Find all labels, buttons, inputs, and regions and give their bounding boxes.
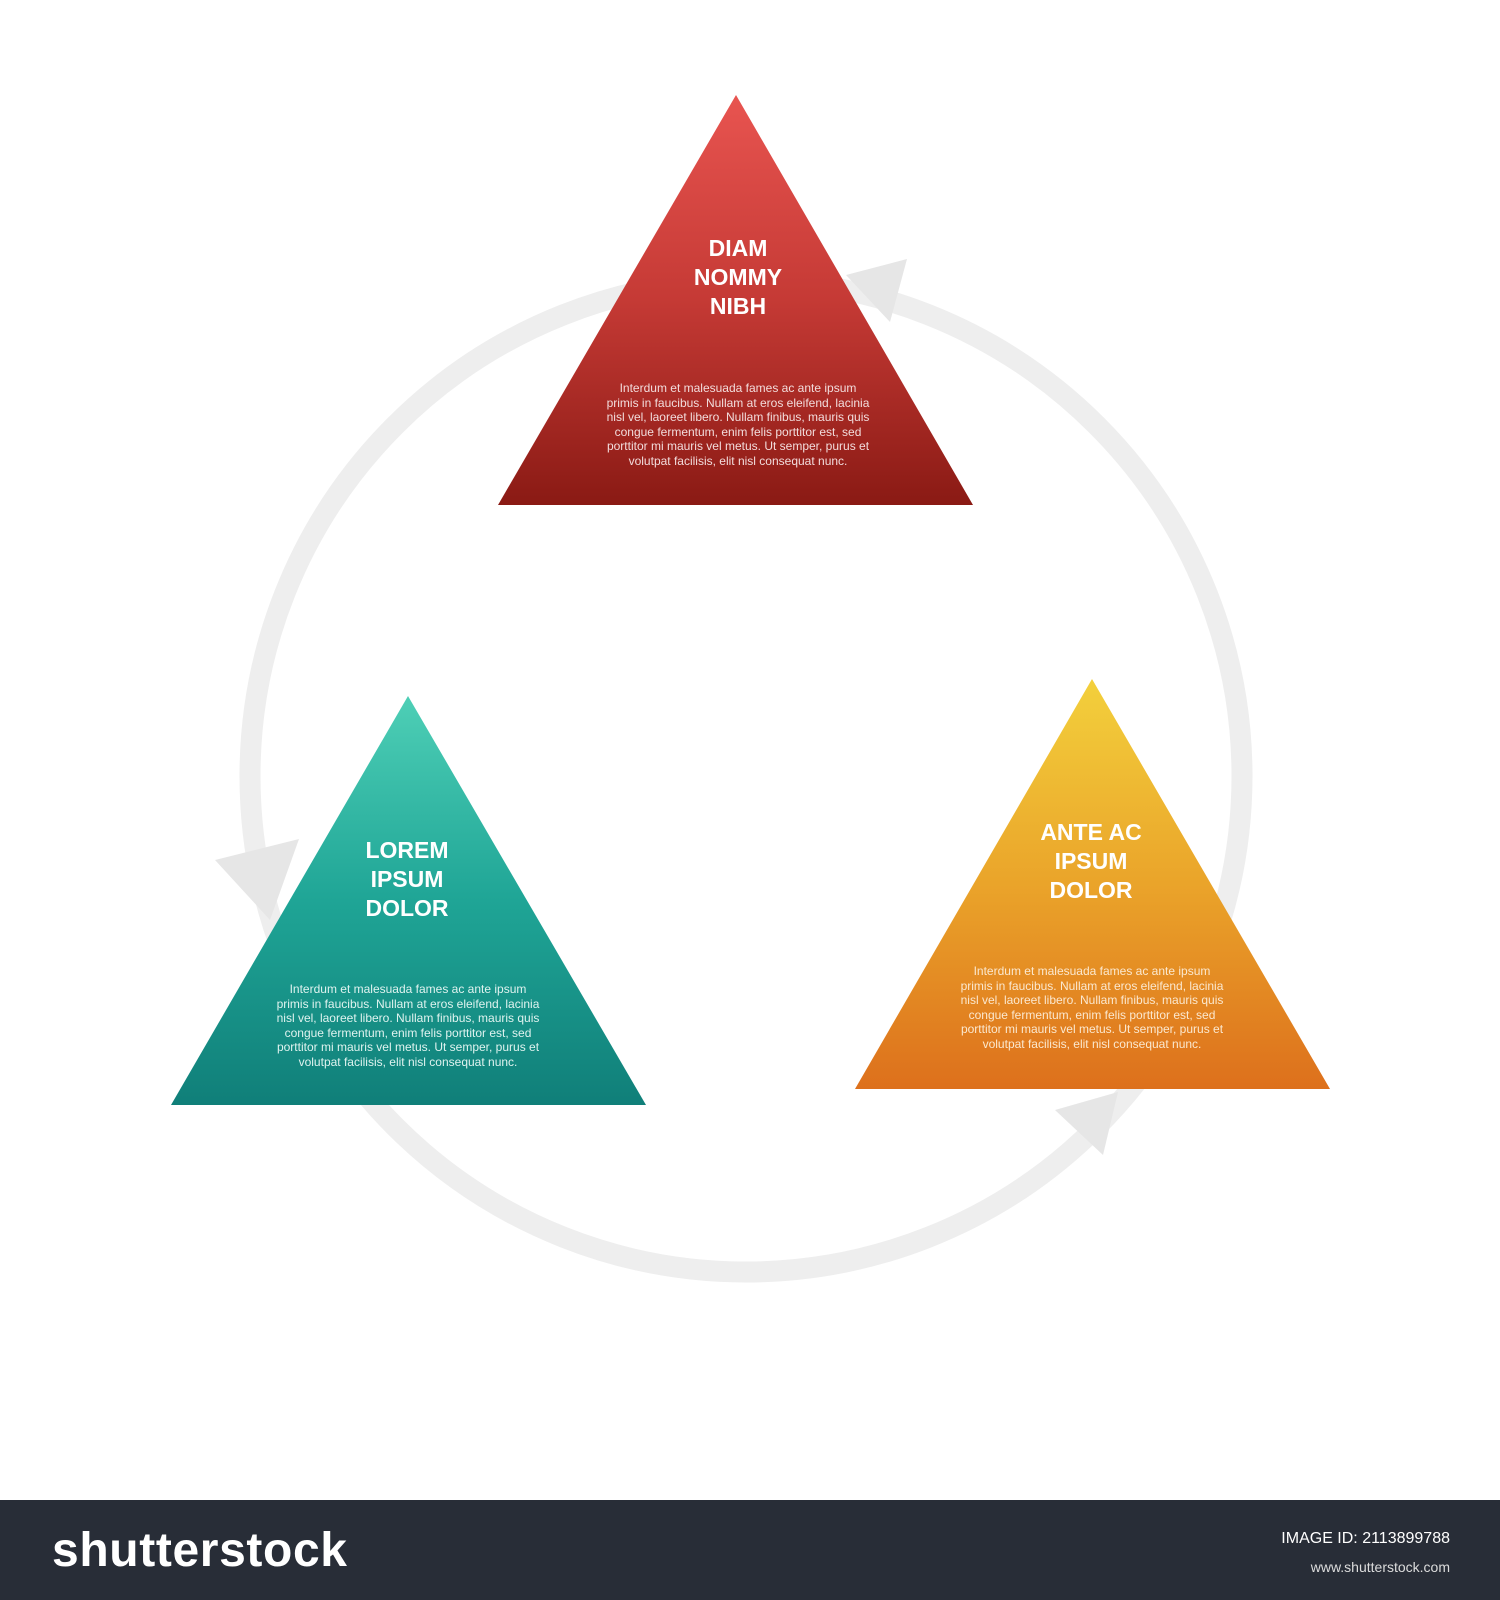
panel: teal triangle [171,696,646,1105]
arrow: to orange [1055,1092,1118,1155]
text block: teal: primis in faucibus. Nullam at eros eleifend, lacinia [277,997,540,1011]
text block: red: congue fermentum, enim felis porttitor est, sed [615,425,861,439]
cycle ring [250,280,1242,1272]
footer bar [0,1500,1500,1600]
heading: orange: IPSUM [1055,848,1127,874]
text block: orange: primis in faucibus. Nullam at eros eleifend, lacinia [961,979,1224,993]
arrow: to teal [215,839,299,920]
heading: teal: IPSUM [371,866,443,892]
logo text: shutterstock [52,1524,347,1577]
text block: red: nisl vel, laoreet libero. Nullam finibus, mauris quis [607,410,869,424]
heading: orange: DOLOR [1049,877,1133,903]
image id: IMAGE ID: 2113899788 [1281,1530,1450,1547]
panel: orange triangle [855,679,1330,1089]
heading: red: NOMMY [694,264,782,290]
website: www.shutterstock.com [1310,1559,1450,1575]
text block: orange: volutpat facilisis, elit nisl consequat nunc. [983,1037,1201,1051]
text block: orange: Interdum et malesuada fames ac ante ipsum [974,964,1210,978]
text block: teal: volutpat facilisis, elit nisl consequat nunc. [299,1055,517,1069]
heading: red: DIAM [709,235,767,261]
heading: teal: LOREM [365,837,449,863]
text block: teal: nisl vel, laoreet libero. Nullam finibus, mauris quis [277,1011,539,1025]
text block: teal: congue fermentum, enim felis porttitor est, sed [285,1026,531,1040]
heading: teal: DOLOR [365,895,449,921]
heading: red: NIBH [710,293,766,319]
panel: red triangle [498,95,973,505]
text block: orange: congue fermentum, enim felis porttitor est, sed [969,1008,1215,1022]
text block: teal: Interdum et malesuada fames ac ante ipsum [290,982,526,996]
text block: red: Interdum et malesuada fames ac ante ipsum [620,381,856,395]
arrow: to red [846,259,907,322]
text block: orange: nisl vel, laoreet libero. Nullam finibus, mauris quis [961,993,1223,1007]
text block: teal: porttitor mi mauris vel metus. Ut semper, purus et [277,1040,540,1054]
heading: orange: ANTE AC [1040,819,1142,845]
text block: red: volutpat facilisis, elit nisl consequat nunc. [629,454,847,468]
text block: orange: porttitor mi mauris vel metus. Ut semper, purus et [961,1022,1224,1036]
text block: red: primis in faucibus. Nullam at eros eleifend, lacinia [607,396,870,410]
text block: red: porttitor mi mauris vel metus. Ut semper, purus et [607,439,870,453]
